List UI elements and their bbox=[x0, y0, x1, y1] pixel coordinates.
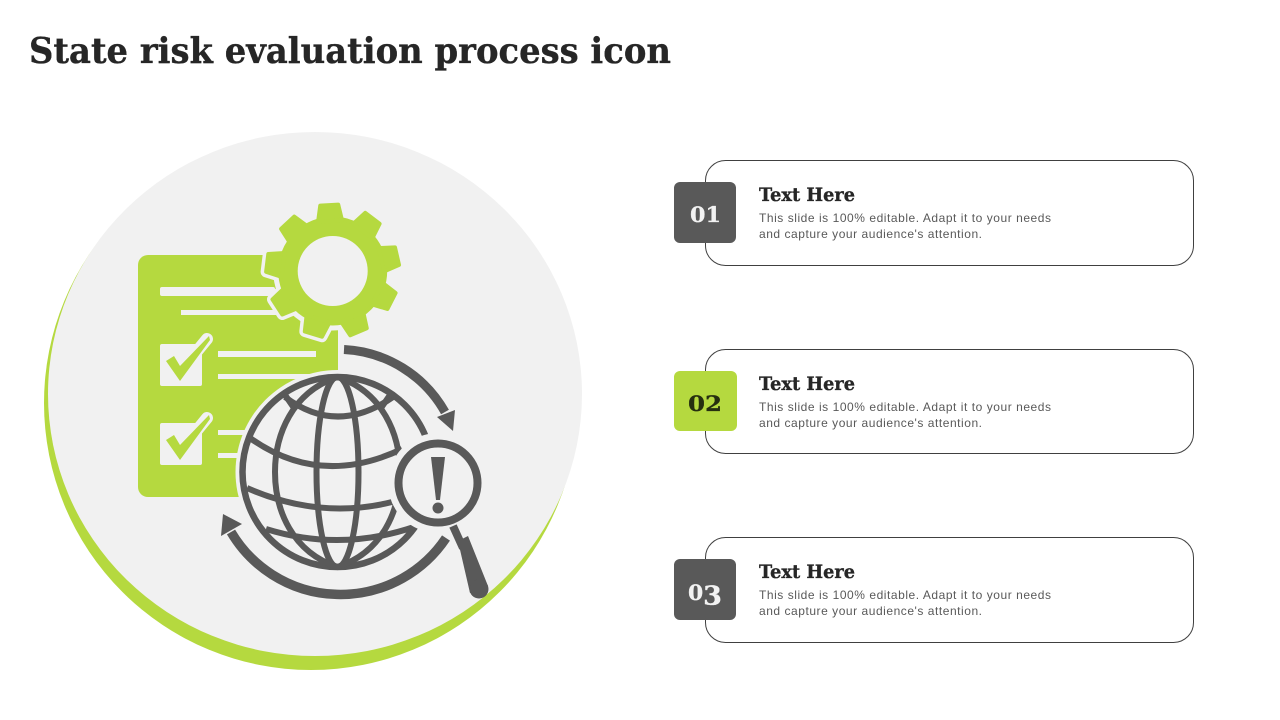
description 01 bbox=[759, 211, 1051, 241]
panel: item 02 bbox=[674, 350, 1194, 454]
title: State risk evaluation process icon bbox=[29, 31, 671, 72]
description 01: and capture your audience's attention. bbox=[759, 227, 982, 241]
heading 01: Text Here bbox=[759, 185, 855, 206]
panel: item 01 bbox=[674, 160, 1194, 266]
icon: second checkbox bbox=[160, 415, 210, 465]
card outline bbox=[706, 538, 1194, 642]
description 02 bbox=[759, 400, 1051, 430]
description 02: and capture your audience's attention. bbox=[759, 416, 982, 430]
icon: magnifying glass with exclamation bbox=[388, 433, 488, 598]
card outline bbox=[706, 350, 1194, 454]
heading 02: Text Here bbox=[759, 374, 855, 395]
icon: gear bbox=[266, 204, 400, 338]
icon: circular arrow bottom bbox=[221, 514, 446, 594]
description 03 bbox=[759, 588, 1051, 618]
panel: circular illustration bbox=[44, 132, 582, 670]
number badge 03: 0 bbox=[688, 580, 703, 605]
card outline bbox=[706, 160, 1194, 266]
heading 03: Text Here bbox=[759, 562, 855, 583]
light grey circle bbox=[48, 132, 582, 656]
icon: globe bbox=[236, 370, 440, 574]
number badge 01 bbox=[674, 182, 736, 243]
number badge 02: 02 bbox=[688, 391, 722, 416]
description 03: and capture your audience's attention. bbox=[759, 604, 982, 618]
description 02: This slide is 100% editable. Adapt it to your needs bbox=[759, 400, 1051, 414]
description 01: This slide is 100% editable. Adapt it to your needs bbox=[759, 211, 1051, 225]
number badge 03: 3 bbox=[703, 582, 722, 612]
icon: circular arrow top bbox=[344, 350, 455, 431]
icon: first checkbox bbox=[160, 336, 210, 386]
description 03: This slide is 100% editable. Adapt it to your needs bbox=[759, 588, 1051, 602]
panel: item 03 bbox=[674, 538, 1194, 642]
green crescent backing circle bbox=[44, 136, 578, 670]
number badge 02 bbox=[674, 371, 737, 431]
number badge 01: 01 bbox=[690, 202, 721, 227]
number badge 03 bbox=[674, 559, 736, 620]
icon: checklist document bbox=[138, 255, 338, 497]
